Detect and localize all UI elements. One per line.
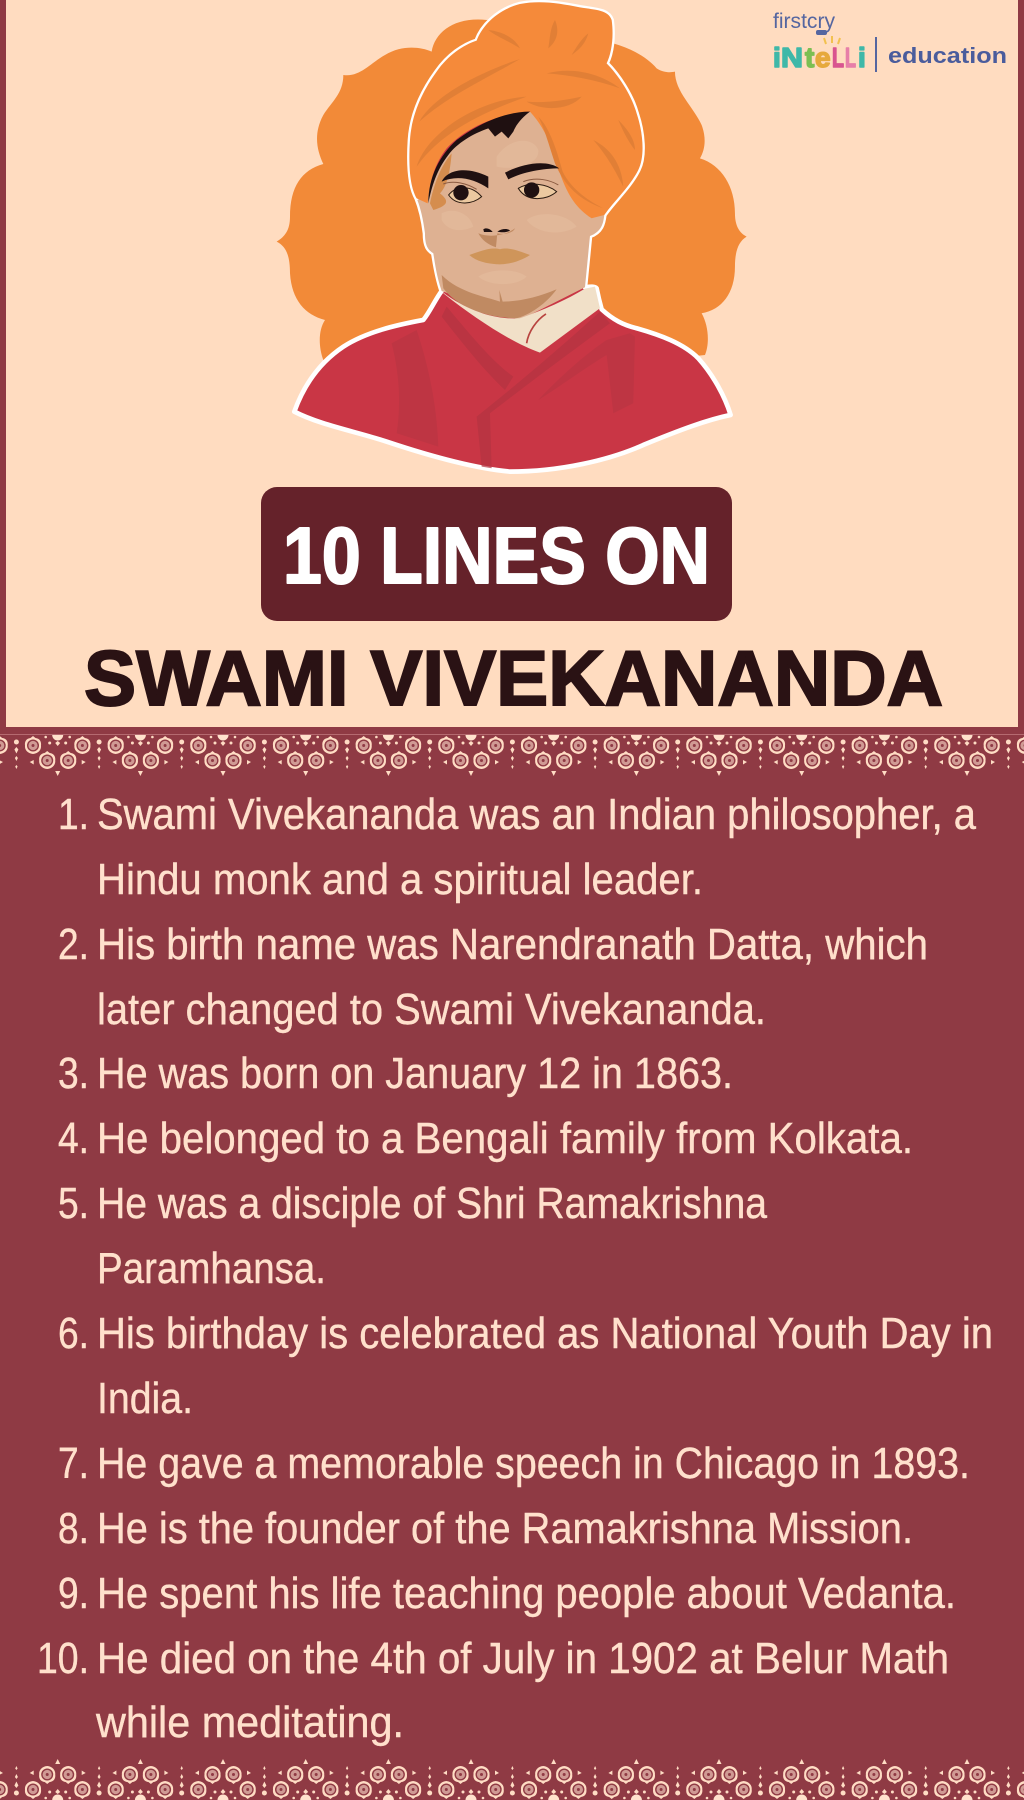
item 6 [58,1309,993,1423]
item 5: He was a disciple of Shri Ramakrishna [97,1179,767,1228]
hair [428,112,530,203]
item 1: Hindu monk and a spiritual leader. [97,855,703,904]
mandala halo [277,20,747,367]
item 10: 10. [37,1634,89,1683]
item 3: He was born on January 12 in 1863. [97,1049,733,1098]
logo text: firstcry: firstcry [773,10,835,33]
item 9: 9. [58,1569,89,1618]
item 10: while meditating. [95,1698,404,1747]
item 3: 3. [58,1049,89,1098]
robe folds [392,307,635,468]
item 2 [58,920,928,1034]
eyebrows [442,170,488,188]
item 6: India. [97,1374,193,1423]
item 1 [58,790,976,904]
logo: sun rays [824,36,840,44]
item 8: 8. [58,1504,89,1553]
logo text: intelli [773,42,866,73]
eyes [449,188,482,203]
item 6: 6. [58,1309,89,1358]
turban folds [417,20,635,208]
logo separator [875,37,877,72]
nose [478,228,515,247]
illustration: portrait of Swami Vivekananda [277,2,747,472]
numbered list: 10 lines [37,790,993,1747]
item 10 [37,1634,949,1747]
item 4: 4. [58,1114,89,1163]
item 2: His birth name was Narendranath Datta, which [97,920,928,969]
decorative border: bottom pattern [0,1759,1024,1800]
item 2: later changed to Swami Vivekananda. [97,985,766,1034]
item 1: 1. [58,790,89,839]
item 4: He belonged to a Bengali family from Kolkata. [97,1114,913,1163]
logo text: intelli: t [805,42,814,73]
item 5: Paramhansa. [97,1244,326,1293]
logo: firstcry intelli education [773,10,1007,73]
decorative border: top pattern [0,735,1024,776]
item 10: He died on the 4th of July in 1902 at Belur Math [97,1634,949,1683]
white outlined silhouette [294,2,731,472]
turban [409,2,643,218]
item 5 [58,1179,767,1293]
item 7: 7. [58,1439,89,1488]
logo: .com pill [816,30,827,35]
collar crease [527,314,546,343]
item 9: He spent his life teaching people about Vedanta. [97,1569,956,1618]
logo text: intelli: N [781,42,803,73]
item 8: He is the founder of the Ramakrishna Mission. [97,1504,913,1553]
item 2: 2. [58,920,89,969]
item 5: 5. [58,1179,89,1228]
title badge: 10 LINES ON [261,487,732,621]
lips [469,249,530,264]
face highlights [442,141,577,284]
logo text: intelli: L [832,42,844,73]
panel: header background [6,0,1018,727]
neck shadow [442,275,557,318]
logo text: intelli: L [845,42,856,73]
logo text: intelli: e [815,42,831,73]
title badge: 10 LINES ON: 10 LINES ON [283,511,710,600]
heading: SWAMI VIVEKANANDA: SWAMI VIVEKANANDA [84,634,943,722]
collar [443,287,600,353]
logo text: intelli: i [858,42,866,73]
logo text: intelli: i [773,42,781,73]
logo text: education: education [888,43,1007,68]
left temple shadow [430,153,452,210]
face [417,112,604,320]
